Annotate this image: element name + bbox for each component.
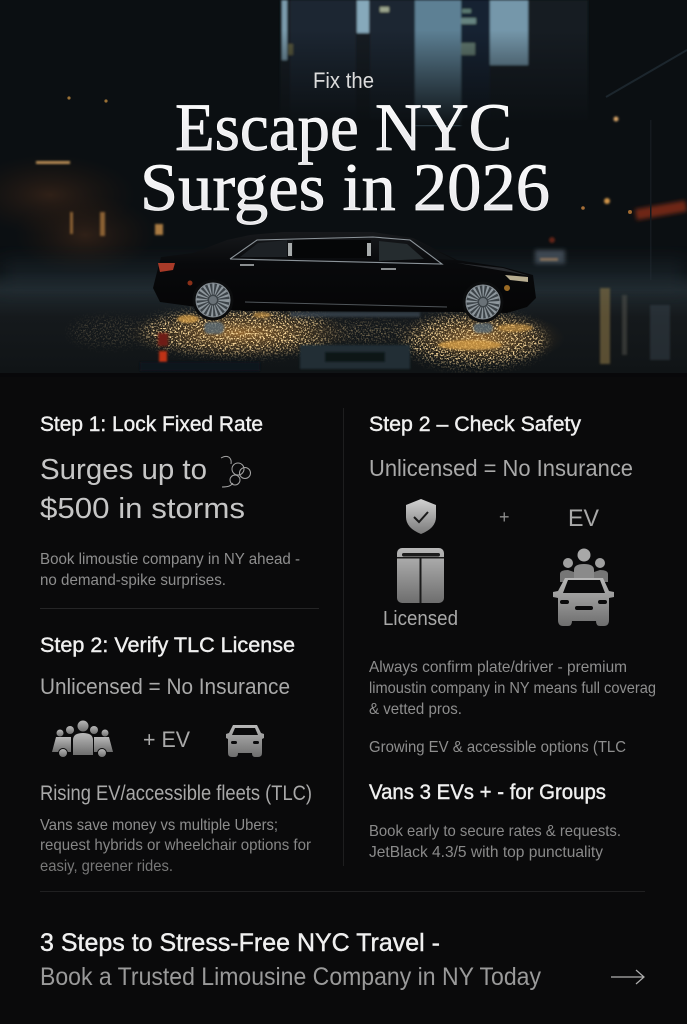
panel: left column: [40, 413, 319, 875]
hero title: Escape NYC: [175, 89, 512, 165]
side windows: [240, 240, 424, 261]
vans body text: JetBlack 4.3/5 with top punctuality: [369, 844, 603, 861]
warm buildings left: [0, 96, 163, 275]
body sheen: [457, 263, 530, 276]
red tail-light reflection: [158, 333, 168, 363]
wet road: [0, 278, 687, 338]
skyline with blue sky gaps: [280, 0, 588, 125]
check safety heading: Step 2 – Check Safety: [369, 413, 581, 436]
warm glow under car: [140, 310, 554, 362]
CTA subline: Book a Trusted Limousine Company in NY Today: [40, 963, 541, 991]
headlight: [505, 275, 528, 282]
tail light: [158, 263, 175, 272]
hero kicker: Fix the: [313, 68, 374, 93]
safety body text: Always confirm plate/driver - premium: [369, 659, 627, 676]
arrow: [611, 970, 644, 984]
icon: licensed doors: [397, 548, 444, 603]
fleet body text: Vans save money vs multiple Ubers;: [40, 817, 278, 834]
fleet body text: [40, 817, 312, 875]
vans body text: Book early to secure rates & requests.: [369, 823, 621, 840]
panel: right column: [369, 413, 656, 861]
vans heading: Vans 3 EVs + - for Groups: [369, 780, 606, 804]
surge stat: Surges up to: [40, 454, 207, 486]
rear wheel: [194, 282, 230, 320]
fleet body text: easiy, greener rides.: [40, 858, 173, 875]
licensed label: Licensed: [383, 608, 458, 630]
hero title: [140, 89, 550, 225]
safety body text: [369, 659, 656, 718]
icon: car front: [226, 725, 264, 757]
CTA headline: 3 Steps to Stress-Free NYC Travel -: [40, 929, 440, 957]
hero title: Surges in 2026: [140, 149, 550, 225]
fleet body text: request hybrids or wheelchair options for: [40, 837, 312, 854]
road reflections: [140, 288, 670, 371]
EV label: EV: [568, 505, 599, 532]
unlicensed warning: Unlicensed = No Insurance: [40, 674, 290, 699]
front wheel: [466, 284, 500, 322]
step 1 heading: Step 1: Lock Fixed Rate: [40, 413, 263, 436]
hero bottom edge: [0, 373, 687, 377]
plus sign: +: [499, 507, 510, 527]
EV trend line: Rising EV/accessible fleets (TLC): [40, 781, 312, 805]
safety body text: & vetted pros.: [369, 701, 462, 718]
unlicensed warning: Unlicensed = No Insurance: [369, 455, 633, 481]
icon: shield check: [406, 499, 436, 534]
EV options line: Growing EV & accessible options (TLC: [369, 739, 626, 756]
vans body text: [369, 823, 621, 861]
plus EV label: + EV: [143, 727, 190, 752]
icon: storm cloud scribble: [221, 456, 250, 487]
hero photo: limousine on a rainy NYC street: [0, 0, 687, 373]
surge stat: [40, 454, 245, 525]
car body: [153, 232, 536, 313]
surge stat: $500 in storms: [40, 493, 245, 525]
limousine: [153, 232, 536, 322]
icon: group with car: [553, 548, 614, 626]
gold sparkles on asphalt: [68, 306, 552, 373]
skyline fade into darkness: [280, 35, 588, 125]
chrome trim: [230, 237, 442, 264]
gold patches beside the wheels: [177, 312, 533, 350]
step 1 body: no demand-spike surprises.: [40, 572, 226, 589]
call to action: [40, 929, 644, 991]
step 1 body: [40, 551, 300, 589]
icon: group van: [52, 720, 113, 758]
step 1 body: Book limoustie company in NY ahead -: [40, 551, 300, 568]
step 2 heading: Step 2: Verify TLC License: [40, 634, 295, 657]
safety body text: limoustin company in NY means full coverag: [369, 680, 656, 697]
street lights right: [535, 50, 687, 280]
